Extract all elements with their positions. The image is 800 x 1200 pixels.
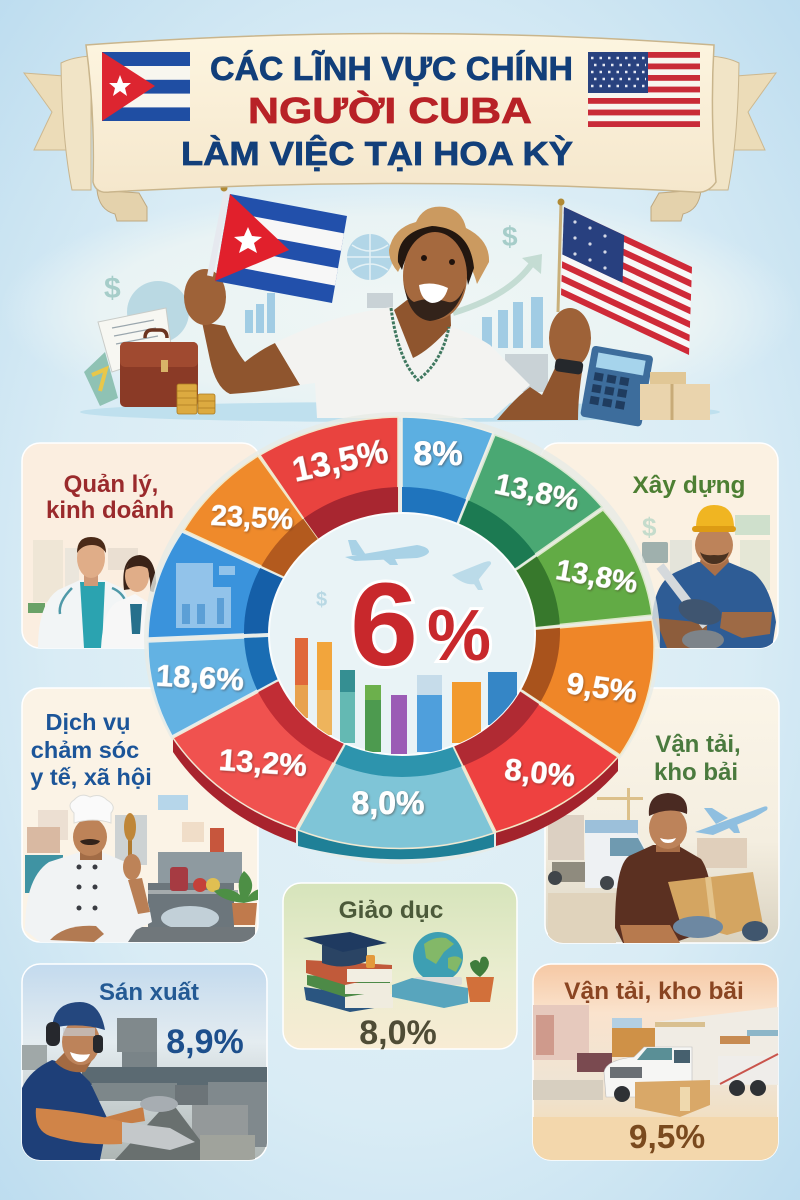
- percentage labels: 8,0%: [503, 751, 577, 794]
- hat: [389, 207, 489, 284]
- value: education: 8,0%: [359, 1014, 437, 1052]
- right arm: [497, 368, 582, 420]
- percentage labels: 8%: [413, 435, 463, 473]
- icon: fist left: [184, 269, 226, 325]
- segment: 8,0% bottom: [297, 744, 495, 850]
- value: manufacturing: 8,9%: [166, 1023, 244, 1061]
- flag: USA banner: [588, 52, 700, 127]
- panel: education: [283, 883, 517, 1052]
- percentage labels: 23,5%: [210, 500, 294, 536]
- heading: healthcare: [30, 709, 152, 790]
- person with flags: [184, 207, 591, 420]
- panel: logistics: [533, 964, 778, 1160]
- icon: airplane large: [345, 540, 429, 565]
- icon: plant pot: [466, 957, 494, 1002]
- beard: [404, 283, 465, 321]
- necklace: [391, 308, 449, 380]
- percentage labels: 13,8%: [553, 554, 640, 600]
- title line 3: LÀM VIỆC TẠI HOA KỲ: [181, 135, 573, 172]
- percentage labels: 8,0%: [352, 785, 424, 821]
- panel: construction: [540, 443, 778, 650]
- percentage labels: 13,2%: [218, 742, 308, 783]
- segment: 9,5%: [521, 619, 655, 756]
- machinery: [22, 1018, 267, 1160]
- curl left: [97, 190, 147, 221]
- shirt: [275, 307, 530, 418]
- illustration: pickup truck: [604, 1047, 778, 1102]
- heading: management: [46, 471, 174, 524]
- ribbon tail right: [730, 73, 776, 150]
- side roll left: [61, 56, 91, 190]
- percentage labels: 13,8%: [492, 467, 582, 517]
- icon: briefcase: [120, 330, 198, 407]
- icon: dollar: $: [316, 589, 327, 611]
- panel: management: [22, 443, 260, 648]
- banner: [24, 34, 776, 221]
- bar chart: [295, 638, 517, 754]
- illustration: doctors: [38, 537, 156, 648]
- panel: transport and warehousing: [545, 688, 779, 943]
- face: [403, 232, 467, 320]
- neck: [394, 300, 451, 358]
- flag: Cuba banner: [102, 52, 190, 121]
- title line 1: CÁC LĨNH VỰC CHÍNH: [210, 50, 573, 87]
- side roll right: [709, 56, 739, 190]
- heading: construction: Xây dựng: [632, 472, 746, 499]
- segment: 13,5%: [259, 416, 399, 538]
- heading: healthcare: Dịch vụ: [46, 709, 130, 735]
- curl right: [651, 190, 701, 221]
- icon: globe: [413, 932, 463, 985]
- segment: 13,8% second: [516, 509, 653, 628]
- segment: 13,2%: [172, 681, 344, 830]
- percentage labels: 9,5%: [565, 665, 639, 710]
- heading: education: Giảo dục: [339, 897, 443, 924]
- segment: 8%: [402, 418, 494, 523]
- heading: transport: [654, 731, 741, 786]
- left arm: [202, 322, 300, 394]
- heading: management: Quản lý,: [64, 471, 158, 498]
- segment: 8,0% right: [454, 691, 619, 833]
- watch: [554, 358, 584, 375]
- panel: healthcare and social: [22, 688, 262, 942]
- illustration: books and cap: [303, 932, 393, 1012]
- heading: transport: Vận tải,: [655, 731, 741, 758]
- heading: healthcare: chảm sóc: [31, 737, 139, 763]
- segment: buildings: [148, 533, 283, 638]
- donut chart: [144, 412, 660, 864]
- icon: airplane: [695, 806, 768, 835]
- flag: USA hero: [558, 198, 692, 355]
- illustration: factory worker: [22, 1002, 195, 1160]
- title: [181, 50, 573, 172]
- value: 6%: %: [427, 596, 491, 676]
- scroll body: [86, 34, 716, 192]
- icon: teal book: [392, 978, 468, 1008]
- heading: logistics: Vận tải, kho bãi: [564, 978, 744, 1005]
- value: logistics: 9,5%: [629, 1119, 705, 1156]
- panel: manufacturing: [22, 964, 267, 1160]
- value: 6%: 6: [350, 559, 418, 691]
- segment: 13,8%: [458, 434, 603, 569]
- percentage labels: [155, 432, 640, 821]
- illustration: delivery truck: [548, 788, 747, 943]
- percentage labels: 18,6%: [155, 658, 245, 697]
- panel: construction: $: [642, 512, 657, 542]
- heading: transport: kho bải: [654, 759, 738, 786]
- hero background scene: $: [502, 221, 518, 252]
- icon: airplane small: [452, 561, 491, 590]
- illustration: chef: [25, 795, 152, 942]
- hero background scene: [0, 185, 800, 435]
- icon: folder: [84, 352, 118, 406]
- icon: documents: [98, 308, 172, 372]
- segment: 23,5%: [183, 455, 318, 577]
- icon: fist right: [549, 308, 591, 368]
- illustration: box: [635, 1080, 710, 1117]
- rim: [173, 738, 618, 859]
- donut centre: [269, 513, 535, 755]
- segment: 18,6%: [148, 637, 278, 735]
- icon: parcels: [640, 372, 710, 420]
- title line 2: NGƯỜI CUBA: [248, 89, 532, 131]
- heading: healthcare: y tế, xã hội: [30, 764, 152, 790]
- ribbon tail left: [24, 73, 70, 150]
- kitchen scene: [25, 795, 262, 942]
- halo: [144, 412, 660, 864]
- illustration: delivery worker: [615, 793, 768, 943]
- value: 6%: [350, 559, 491, 691]
- heading: management: kinh doânh: [46, 497, 174, 524]
- illustration: construction worker: [642, 505, 776, 650]
- mouth: [419, 284, 448, 303]
- heading: manufacturing: Sán xuất: [99, 979, 199, 1006]
- percentage labels: 13,5%: [289, 432, 391, 490]
- hair: [398, 226, 474, 285]
- icon: coins: [177, 384, 215, 414]
- flag: Cuba hero: [210, 184, 347, 303]
- warehouse scene: [533, 1005, 778, 1160]
- hero background scene: $: [104, 272, 121, 305]
- icon: calculator: [580, 345, 654, 427]
